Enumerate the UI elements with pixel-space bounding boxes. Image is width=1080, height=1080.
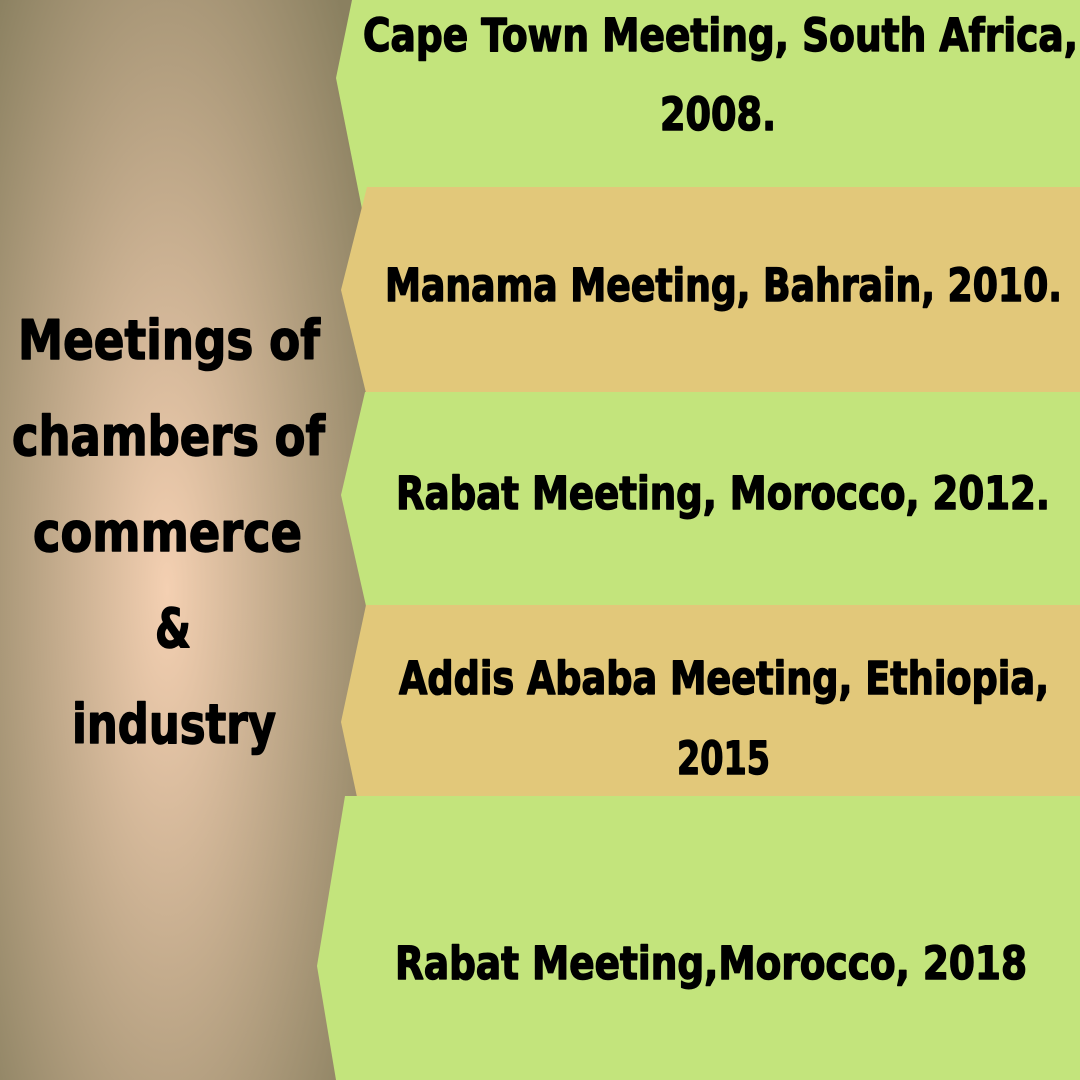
heading: chambers of xyxy=(12,405,325,468)
text: Addis Ababa: 2015 xyxy=(677,732,770,785)
band 4 xyxy=(341,605,1080,797)
text: Cape Town xyxy=(363,9,1078,141)
band 3 xyxy=(341,392,1080,606)
band 5 xyxy=(317,796,1080,1080)
text: Addis Ababa xyxy=(399,652,1049,785)
heading: industry xyxy=(72,693,276,756)
panel: gradient background xyxy=(0,0,420,1080)
band 2 xyxy=(341,187,1080,393)
text: Cape Town: 2008. xyxy=(660,88,776,141)
heading: Meetings of xyxy=(18,309,320,372)
band 1 xyxy=(336,0,1080,209)
heading: & xyxy=(155,597,191,660)
heading: commerce xyxy=(33,501,302,564)
heading xyxy=(12,309,325,756)
